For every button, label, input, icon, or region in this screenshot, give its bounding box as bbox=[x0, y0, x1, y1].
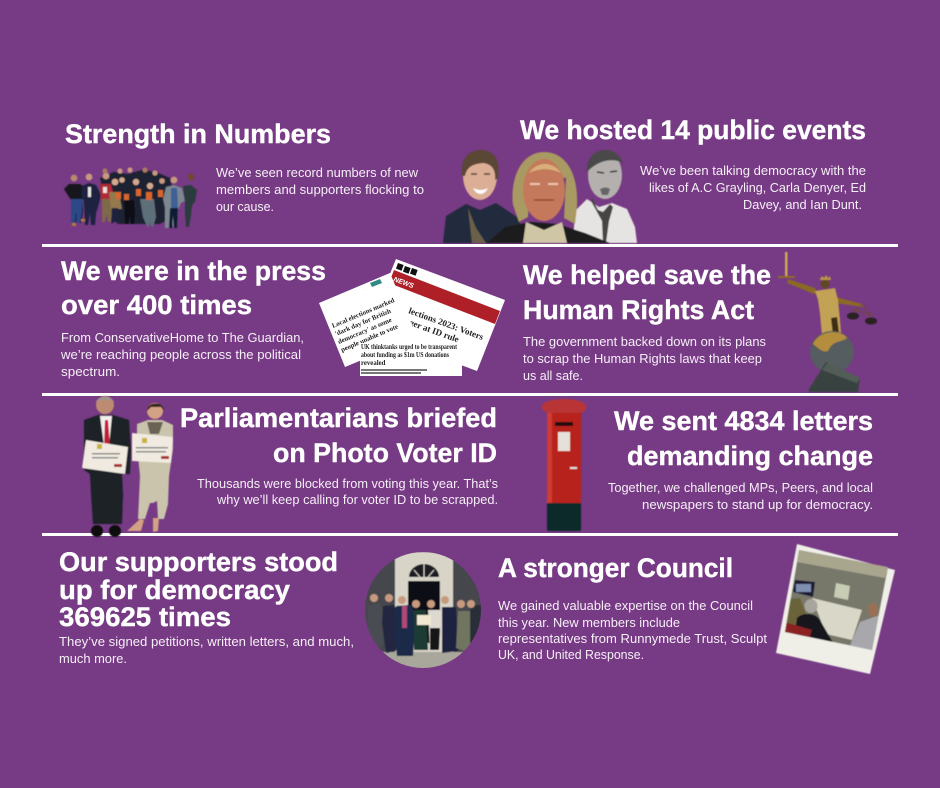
text block: talking democracy: likes of A.C Grayling, Carla Denyer, Ed bbox=[649, 181, 866, 195]
icon: newspaper clippings: revealed bbox=[361, 360, 386, 367]
heading: supporters: 369625 times bbox=[59, 602, 231, 632]
icon: polaroid of council meeting bbox=[776, 544, 895, 674]
icon: newspaper clippings: people unable to vote bbox=[340, 323, 399, 354]
icon: newspaper clippings: democracy' as some bbox=[337, 317, 393, 346]
panel: strength in numbers bbox=[64, 119, 424, 228]
heading: supporters: up for democracy bbox=[59, 575, 290, 605]
text block: talking democracy: We’ve been talking democracy with the bbox=[640, 164, 866, 178]
text block: valuable expertise: representatives from Runnymede Trust, Sculpt bbox=[498, 632, 768, 646]
heading: supporters bbox=[59, 547, 338, 632]
heading: in the press: We were in the press bbox=[61, 256, 326, 286]
panel: supporters stood up bbox=[59, 547, 482, 670]
icon: red post box bbox=[542, 399, 586, 531]
text block: blocked from voting: why we’ll keep calling for voter ID to be scrapped. bbox=[216, 493, 498, 507]
text block: record numbers bbox=[216, 166, 424, 214]
heading: human rights act: Human Rights Act bbox=[523, 295, 754, 325]
text block: valuable expertise: We gained valuable expertise on the Council bbox=[498, 599, 753, 613]
icon: newspaper clippings: 'dark day for British bbox=[334, 308, 392, 338]
icon: two parliamentarians with signs bbox=[82, 396, 173, 537]
heading: in the press bbox=[61, 256, 326, 320]
heading: parliamentarians briefed bbox=[180, 403, 497, 468]
heading: in the press: over 400 times bbox=[61, 290, 252, 320]
text block: valuable expertise: this year. New members include bbox=[498, 616, 680, 630]
icon: newspaper clippings: lections 2023: Voters bbox=[407, 305, 485, 342]
text block: government backed down: us all safe. bbox=[523, 369, 583, 383]
panel: press coverage bbox=[60, 256, 505, 379]
panel: letters sent bbox=[542, 399, 873, 531]
icon: newspaper clippings: nger at ID rule bbox=[403, 315, 460, 344]
text block: record numbers: We’ve seen record numbers of new bbox=[216, 166, 419, 180]
heading: parliamentarians briefed: Parliamentarians briefed bbox=[180, 403, 497, 433]
text block: signed petitions: They’ve signed petitions, written letters, and much, bbox=[59, 635, 354, 649]
icon: newspaper clippings bbox=[319, 259, 505, 376]
heading: parliamentarians briefed: on Photo Voter ID bbox=[273, 438, 497, 468]
heading: letters: demanding change bbox=[627, 441, 873, 471]
icon: newspaper clippings: Local elections marked bbox=[331, 297, 396, 330]
text block: record numbers: our cause. bbox=[216, 200, 274, 214]
icon: lady justice statue bbox=[778, 252, 877, 392]
heading: human rights act bbox=[523, 260, 771, 325]
text block: challenged MPs: Together, we challenged MPs, Peers, and local bbox=[608, 481, 873, 495]
text block: blocked from voting: Thousands were blocked from voting this year. That’s bbox=[197, 477, 498, 491]
text block: valuable expertise bbox=[498, 599, 768, 662]
text block: talking democracy bbox=[640, 164, 866, 212]
text block: conservativehome: spectrum. bbox=[61, 365, 120, 379]
icon: newspaper clippings: NEWS bbox=[392, 276, 415, 290]
icon: three speaker portraits bbox=[443, 150, 637, 243]
panel: human rights act bbox=[523, 252, 877, 392]
heading: public events: We hosted 14 public events bbox=[520, 115, 866, 145]
panel: stronger council bbox=[498, 544, 895, 674]
heading: letters bbox=[614, 406, 873, 471]
text block: blocked from voting bbox=[197, 477, 498, 507]
text block: conservativehome bbox=[60, 331, 304, 379]
panel: parliamentarians briefed bbox=[82, 396, 498, 537]
text block: signed petitions bbox=[59, 635, 354, 666]
text block: talking democracy: Davey, and Ian Dunt. bbox=[743, 198, 862, 212]
heading: a stronger council: A stronger Council bbox=[498, 553, 733, 583]
icon: newspaper clippings: UK thinktanks urged to be transparent bbox=[361, 344, 458, 351]
text block: conservativehome: From ConservativeHome to The Guardian, bbox=[61, 331, 304, 345]
text block: government backed down: to scrap the Human Rights laws that keep bbox=[523, 352, 762, 366]
heading: letters: We sent 4834 letters bbox=[614, 406, 873, 436]
text block: valuable expertise: UK, and United Response. bbox=[498, 648, 644, 662]
icon: newspaper clippings: about funding as $1m US donations bbox=[361, 352, 449, 359]
text block: signed petitions: much more. bbox=[59, 652, 127, 666]
heading: supporters: Our supporters stood bbox=[59, 547, 338, 577]
text block: government backed down: The government backed down on its plans bbox=[523, 335, 766, 349]
heading: human rights act: We helped save the bbox=[523, 260, 771, 290]
text block: challenged MPs bbox=[608, 481, 873, 512]
text block: record numbers: members and supporters flocking to bbox=[216, 183, 424, 197]
text block: government backed down bbox=[523, 335, 766, 383]
text block: challenged MPs: newspapers to stand up for democracy. bbox=[642, 498, 873, 512]
icon: crowd of supporters bbox=[64, 167, 197, 228]
text block: conservativehome: we’re reaching people across the political bbox=[60, 348, 301, 362]
icon: group photo at downing street bbox=[365, 552, 482, 670]
panel: public events bbox=[443, 115, 866, 243]
heading: strength in numbers: Strength in Numbers bbox=[65, 119, 331, 149]
